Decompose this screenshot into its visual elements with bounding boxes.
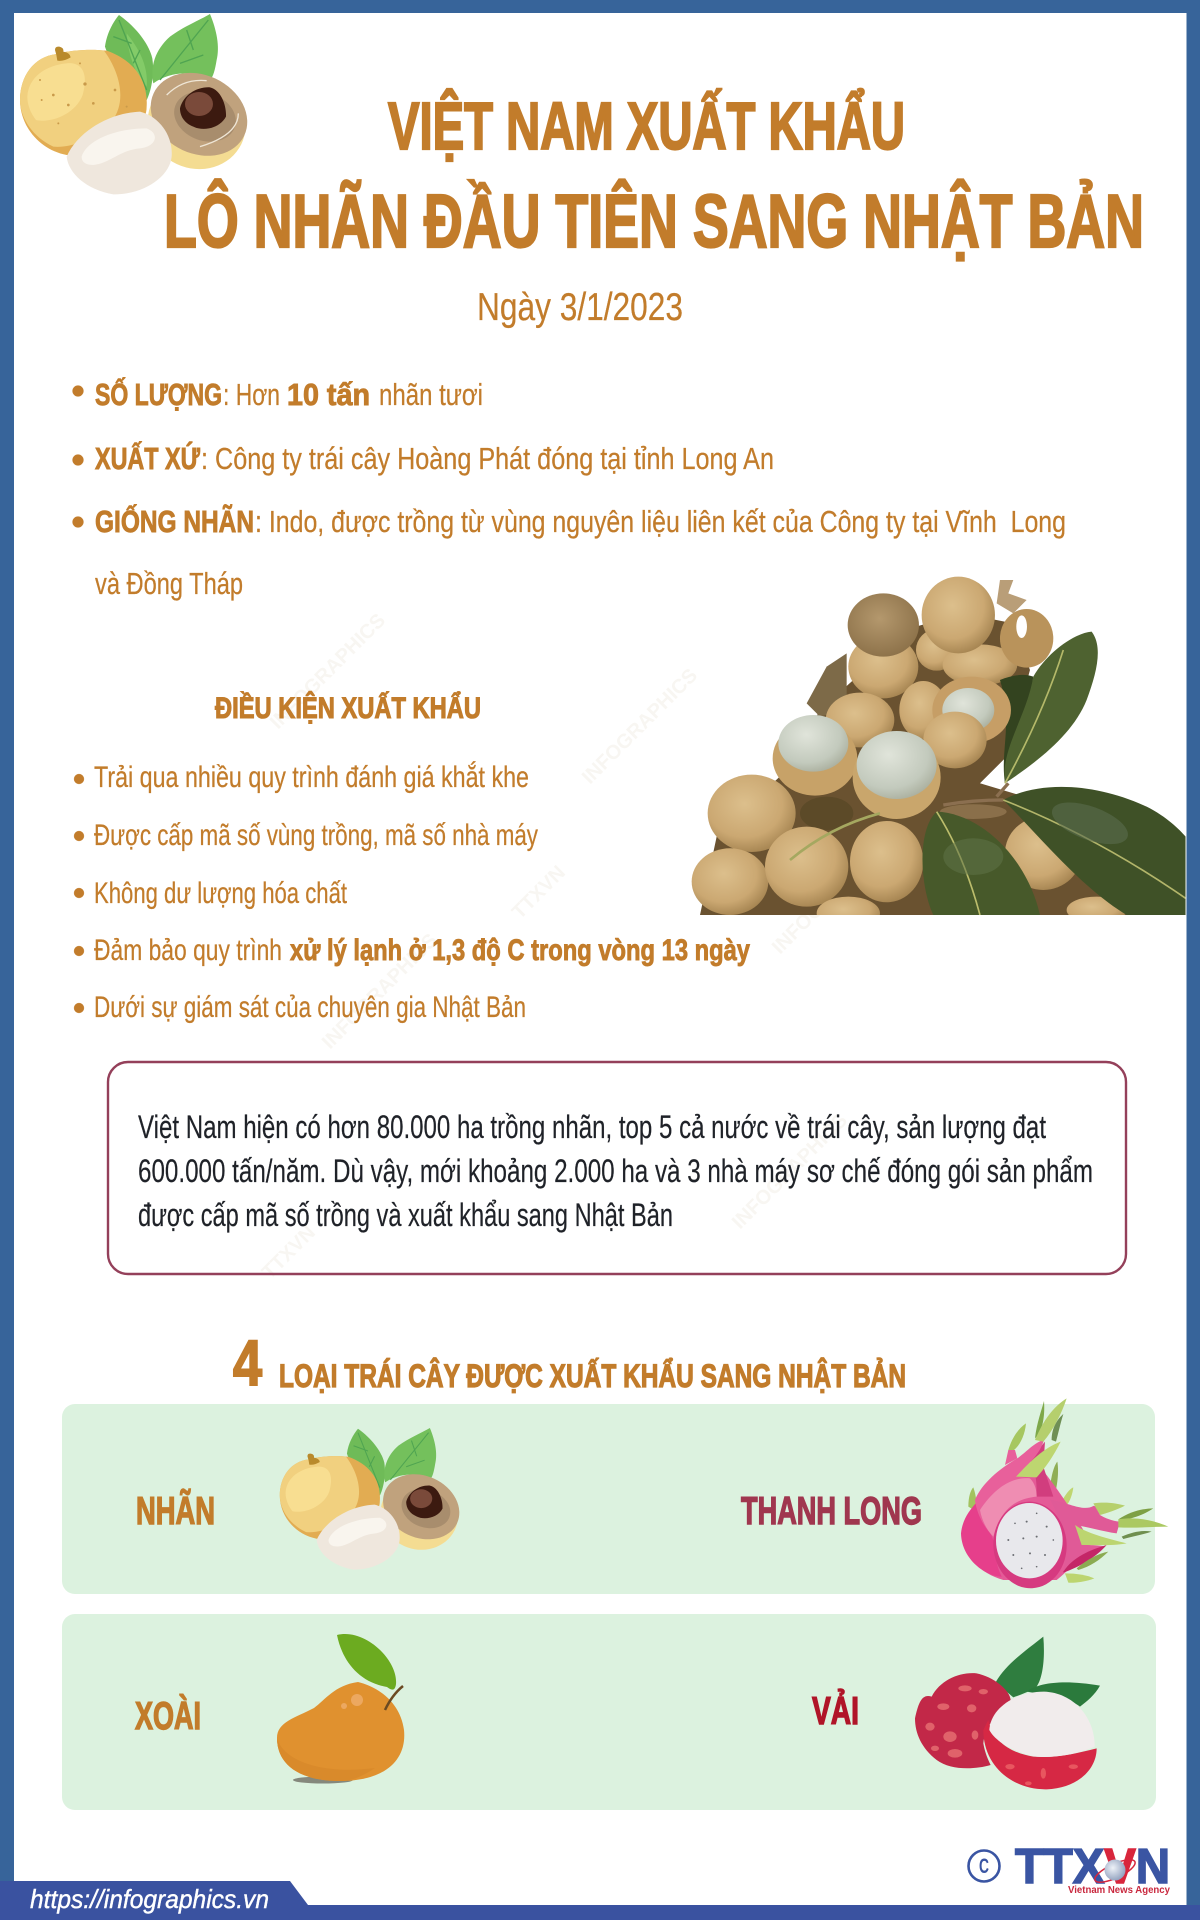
text: INFOGRAPHICS	[266, 610, 390, 734]
leaves	[105, 14, 218, 100]
label: longan: NHÃN	[136, 1489, 215, 1533]
date: Ngày 3/1/2023	[477, 286, 683, 329]
conditions list: Đảm bảo quy trình	[94, 934, 282, 967]
logo: TTXVN: Vietnam News Agency	[1068, 1884, 1170, 1896]
heading: export conditions: ĐIỀU KIỆN XUẤT KHẨU	[215, 691, 481, 725]
conditions list: Được cấp mã số vùng trồng, mã số nhà máy	[94, 819, 538, 852]
heading: four fruits: 4	[233, 1327, 262, 1399]
icon: longan	[280, 1428, 470, 1570]
text: INFOGRAPHICS	[578, 665, 702, 789]
heading: four fruits	[233, 1327, 906, 1399]
title: VIỆT NAM XUẤT KHẨU	[388, 89, 905, 164]
white flesh	[67, 112, 172, 194]
text: INFOGRAPHICS	[318, 930, 442, 1054]
key facts list: : Hơn	[223, 377, 280, 412]
panel: mango and lychee	[62, 1614, 1156, 1810]
key facts list: SỐ LƯỢNG	[95, 376, 222, 412]
key facts list: nhãn tươi	[379, 377, 483, 412]
photo: longan bunch	[692, 577, 1186, 930]
conditions list	[74, 761, 750, 1024]
icon: longan header	[20, 14, 261, 194]
key facts list	[72, 376, 1066, 601]
text: TTXVN	[258, 1222, 320, 1284]
website tab: https://infographics.vn	[30, 1884, 269, 1914]
key facts list: XUẤT XỨ	[95, 440, 200, 476]
label: dragon fruit: THANH LONG	[741, 1490, 922, 1533]
icon: lychee	[915, 1637, 1100, 1789]
conditions list: xử lý lạnh ở 1,3 độ C trong vòng 13 ngày	[290, 934, 750, 967]
label: mango: XOÀI	[135, 1694, 201, 1738]
heading: four fruits: LOẠI TRÁI CÂY ĐƯỢC XUẤT KHẨU SANG NHẬT BẢN	[279, 1358, 906, 1394]
key facts list: GIỐNG NHÃN	[95, 503, 254, 539]
callout box: được cấp mã số trồng và xuất khẩu sang Nhật Bản	[138, 1197, 673, 1233]
callout box	[108, 1062, 1126, 1274]
panel: longan and dragon fruit	[62, 1398, 1168, 1594]
text: INFOGRAPHICS	[768, 835, 892, 959]
logo: TTXVN: TTXVN	[1015, 1840, 1170, 1894]
text: INFOGRAPHICS	[728, 1110, 852, 1234]
conditions list: Dưới sự giám sát của chuyên gia Nhật Bản	[94, 991, 526, 1024]
label: lychee: VẢI	[812, 1689, 859, 1733]
text: TTXVN	[508, 862, 570, 924]
conditions list: Không dư lượng hóa chất	[94, 877, 347, 910]
logo: TTXVN: C	[979, 1855, 989, 1878]
icon: mango	[277, 1634, 404, 1784]
key facts list: : Công ty trái cây Hoàng Phát đóng tại tỉnh Long An	[201, 441, 774, 476]
title	[164, 89, 1144, 263]
halved longan	[135, 58, 261, 183]
key facts list: và Đồng Tháp	[95, 566, 243, 601]
icon: dragon fruit	[961, 1398, 1168, 1590]
conditions list: Trải qua nhiều quy trình đánh giá khắt khe	[94, 761, 529, 794]
key facts list: 10 tấn	[287, 377, 370, 412]
website tab	[0, 1881, 308, 1920]
